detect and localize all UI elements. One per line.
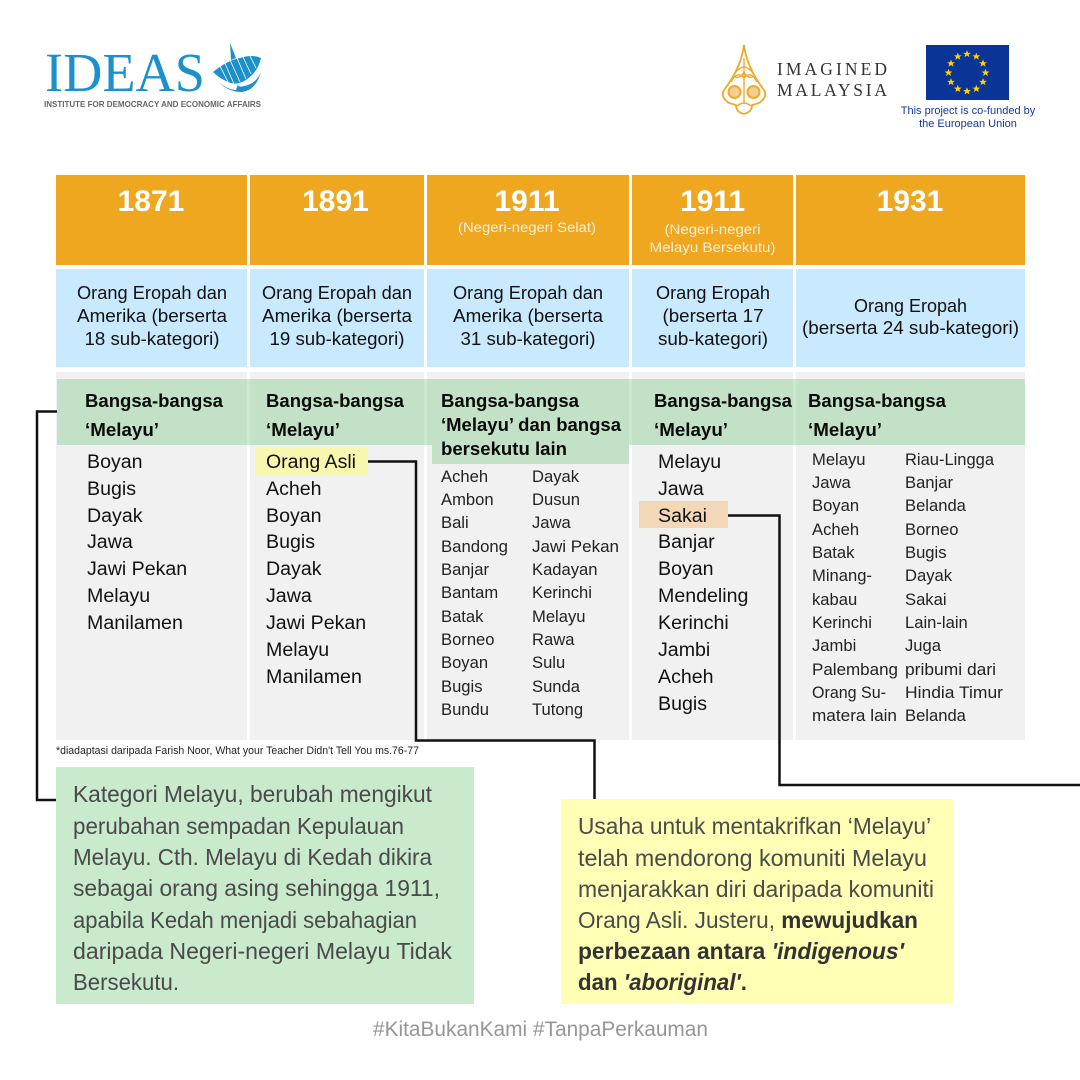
logo: Imagined Malaysia: MALAYSIA <box>777 80 887 100</box>
column 1871 list: Melayu <box>87 585 150 607</box>
column 1931 list: Acheh <box>812 520 859 539</box>
column 1871 list <box>85 391 224 634</box>
year header row: (Negeri-negeri Selat) <box>458 219 596 235</box>
column 1931 list: Boyan <box>812 496 859 515</box>
column 1911 Straits list: Bali <box>441 513 469 532</box>
European category row: 19 sub-kategori) <box>270 329 404 349</box>
column 1911 Straits list: Sunda <box>532 677 581 696</box>
logo: Imagined Malaysia <box>723 45 887 114</box>
column 1891 list: Manilamen <box>266 666 362 688</box>
column 1911 Straits list: ‘Melayu’ dan bangsa <box>441 415 622 435</box>
column 1911 Federated list: Kerinchi <box>658 612 729 634</box>
year header row: (Negeri-negeri <box>664 221 760 237</box>
year header row: 1911 <box>494 185 560 218</box>
European category row: sub-kategori) <box>658 329 768 349</box>
callout: Kategori Melayu: perubahan sempadan Kepulauan <box>73 813 404 839</box>
column 1911 Straits list: Bandong <box>441 537 508 556</box>
EU funding note: the European Union <box>919 118 1017 130</box>
callout: Kategori Melayu: apabila Kedah menjadi sebahagian <box>73 907 417 933</box>
column 1931 list: Jawa <box>812 473 852 492</box>
column 1931 list: Melayu <box>812 450 866 469</box>
callout: Kategori Melayu: sebagai orang asing sehingga 1911, <box>73 875 440 901</box>
column 1911 Federated list: ‘Melayu’ <box>654 420 728 440</box>
column 1911 Straits list: Jawa <box>532 513 572 532</box>
European category row: Orang Eropah dan <box>453 283 603 303</box>
column 1891 list: Boyan <box>266 505 322 527</box>
column 1931 list: Palembang <box>812 660 898 679</box>
European category row: (berserta 17 <box>662 306 764 326</box>
column 1911 Straits list: Sulu <box>532 653 565 672</box>
column 1911 Straits list: Boyan <box>441 653 488 672</box>
hashtags: #KitaBukanKami #TanpaPerkauman <box>373 1018 708 1041</box>
green heading band <box>57 379 1025 464</box>
column 1911 Federated list: Mendeling <box>658 585 748 607</box>
callout: Kategori Melayu: Kategori Melayu, berubah mengikut <box>73 781 432 807</box>
column 1911 Federated list: Banjar <box>658 531 715 553</box>
column 1931 list: Belanda <box>905 706 967 725</box>
column 1931 list: Kerinchi <box>812 613 872 632</box>
European category row <box>56 269 1025 367</box>
European category row: 31 sub-kategori) <box>460 329 596 349</box>
logo: Imagined Malaysia: IMAGINED <box>777 59 887 79</box>
column 1931 list: Borneo <box>905 520 959 539</box>
callout: Kategori Melayu: Bersekutu. <box>73 969 179 995</box>
column 1891 list: ‘Melayu’ <box>266 420 340 440</box>
callout: Usaha mentakrifkan Melayu: menjarakkan diri daripada komuniti <box>578 876 934 902</box>
column 1911 Straits list: Bantam <box>441 583 498 602</box>
connector: Sakai to off-page <box>728 516 1080 785</box>
column 1911 Straits list: Kadayan <box>532 560 598 579</box>
column 1911 Straits list: Rawa <box>532 630 575 649</box>
highlight: Sakai <box>639 501 728 528</box>
column 1911 Straits list: Bundu <box>441 700 489 719</box>
grey list panels <box>56 372 1025 740</box>
callout: Usaha mentakrifkan Melayu: telah mendorong komuniti Melayu <box>578 845 927 871</box>
column 1931 list <box>808 391 1003 725</box>
column 1911 Federated list: Jambi <box>658 639 710 661</box>
column 1911 Federated list: Sakai <box>658 505 707 527</box>
column 1911 Federated list: Bugis <box>658 693 707 715</box>
column 1911 Straits list: Jawi Pekan <box>532 537 619 556</box>
column 1891 list: Orang Asli <box>266 451 356 473</box>
column 1891 list: Jawa <box>266 585 312 607</box>
column 1891 list: Acheh <box>266 478 322 500</box>
callout: Usaha mentakrifkan Melayu <box>561 799 953 1004</box>
column 1931 list: Juga <box>905 636 942 655</box>
column 1911 Straits list: Tutong <box>532 700 583 719</box>
year header row: 1891 <box>302 185 369 218</box>
column 1931 list: kabau <box>812 590 857 609</box>
callout: Usaha mentakrifkan Melayu: Usaha untuk mentakrifkan ‘Melayu’ <box>578 813 931 839</box>
European category row: Amerika (berserta <box>262 306 413 326</box>
column 1931 list: matera lain <box>812 706 897 725</box>
column 1871 list: Jawi Pekan <box>87 558 187 580</box>
EU funding note: This project is co-funded by <box>901 105 1036 117</box>
European category row: Orang Eropah <box>854 296 967 316</box>
column 1931 list: Hindia Timur <box>905 683 1003 702</box>
year header row: Melayu Bersekutu) <box>650 239 776 255</box>
logo: IDEAS: INSTITUTE FOR DEMOCRACY AND ECONOMIC AFFAIRS <box>44 99 261 109</box>
column 1871 list: Dayak <box>87 505 143 527</box>
callout: Kategori Melayu: daripada Negeri-negeri Melayu Tidak <box>73 938 452 964</box>
column 1931 list: Batak <box>812 543 855 562</box>
column 1931 list: Dayak <box>905 566 953 585</box>
year header row: 1871 <box>118 185 184 218</box>
column 1931 list: ‘Melayu’ <box>808 420 882 440</box>
column 1911 Federated list: Jawa <box>658 478 704 500</box>
column 1931 list: Sakai <box>905 590 947 609</box>
column 1891 list <box>266 391 405 688</box>
column 1891 list: Melayu <box>266 639 329 661</box>
column 1911 Straits list: Kerinchi <box>532 583 592 602</box>
callout: Usaha mentakrifkan Melayu: perbezaan antara 'indigenous' <box>578 938 905 964</box>
column 1871 list: Jawa <box>87 531 133 553</box>
column 1931 list: Lain-lain <box>905 613 968 632</box>
column 1911 Straits list: Batak <box>441 607 484 626</box>
column 1911 Straits list: Acheh <box>441 467 488 486</box>
connector: Orang Asli to yellow callout <box>368 462 594 799</box>
European category row: (berserta 24 sub-kategori) <box>802 318 1019 338</box>
column 1931 list: Belanda <box>905 496 967 515</box>
column 1911 Straits list: Dayak <box>532 467 580 486</box>
European category row: 18 sub-kategori) <box>84 329 220 349</box>
column 1931 list: Jambi <box>812 636 856 655</box>
column 1911 Federated list: Bangsa-bangsa <box>654 391 793 411</box>
column 1931 list: Banjar <box>905 473 953 492</box>
column 1911 Federated list: Melayu <box>658 451 721 473</box>
European category row: Orang Eropah <box>656 283 770 303</box>
logo: IDEAS <box>44 42 261 109</box>
column 1911 Straits list: Banjar <box>441 560 489 579</box>
European category row: Amerika (berserta <box>77 306 228 326</box>
column 1871 list: Bugis <box>87 478 136 500</box>
column 1911 Straits list: Ambon <box>441 490 494 509</box>
column 1911 Federated list: Boyan <box>658 558 714 580</box>
year header row <box>56 175 1025 265</box>
column 1931 list: Bangsa-bangsa <box>808 391 947 411</box>
column 1911 Straits list: Borneo <box>441 630 495 649</box>
European category row: Orang Eropah dan <box>262 283 412 303</box>
logo: EU flag <box>926 45 1009 100</box>
column 1931 list: Orang Su- <box>812 683 886 702</box>
callout: Kategori Melayu <box>56 767 474 1004</box>
callout: Usaha mentakrifkan Melayu: Orang Asli. Justeru, mewujudkan <box>578 907 918 933</box>
column 1911 Straits list <box>441 391 622 719</box>
logo: IDEAS: IDEAS <box>45 42 205 103</box>
column 1911 Straits list: Dusun <box>532 490 580 509</box>
column 1911 Straits list: Bangsa-bangsa <box>441 391 580 411</box>
year header row: 1931 <box>877 185 943 218</box>
connector: Melayu heading to green callout <box>37 412 57 800</box>
highlight: Orang Asli <box>255 448 368 475</box>
source note: *diadaptasi daripada Farish Noor, What your Teacher Didn't Tell You ms.76-77 <box>56 745 419 757</box>
column 1871 list: Bangsa-bangsa <box>85 391 224 411</box>
column 1911 Straits list: Melayu <box>532 607 586 626</box>
European category row: Amerika (berserta <box>453 306 604 326</box>
column 1911 Straits list: bersekutu lain <box>441 439 567 459</box>
European category row: Orang Eropah dan <box>77 283 227 303</box>
column 1891 list: Jawi Pekan <box>266 612 366 634</box>
column 1871 list: ‘Melayu’ <box>85 420 159 440</box>
column 1911 Straits list: Bugis <box>441 677 483 696</box>
EU funding note <box>901 105 1036 130</box>
column 1931 list: pribumi dari <box>905 660 996 679</box>
column 1911 Federated list: Acheh <box>658 666 714 688</box>
callout: Kategori Melayu: Melayu. Cth. Melayu di Kedah dikira <box>73 844 433 870</box>
column 1911 Federated list <box>654 391 793 715</box>
column 1871 list: Manilamen <box>87 612 183 634</box>
column 1931 list: Minang- <box>812 566 872 585</box>
column 1931 list: Bugis <box>905 543 947 562</box>
column 1871 list: Boyan <box>87 451 143 473</box>
column 1931 list: Riau-Lingga <box>905 450 995 469</box>
column 1891 list: Bugis <box>266 531 315 553</box>
column 1891 list: Dayak <box>266 558 322 580</box>
callout: Usaha mentakrifkan Melayu: dan 'aboriginal'. <box>578 969 747 995</box>
year header row: 1911 <box>680 185 745 218</box>
column 1891 list: Bangsa-bangsa <box>266 391 405 411</box>
